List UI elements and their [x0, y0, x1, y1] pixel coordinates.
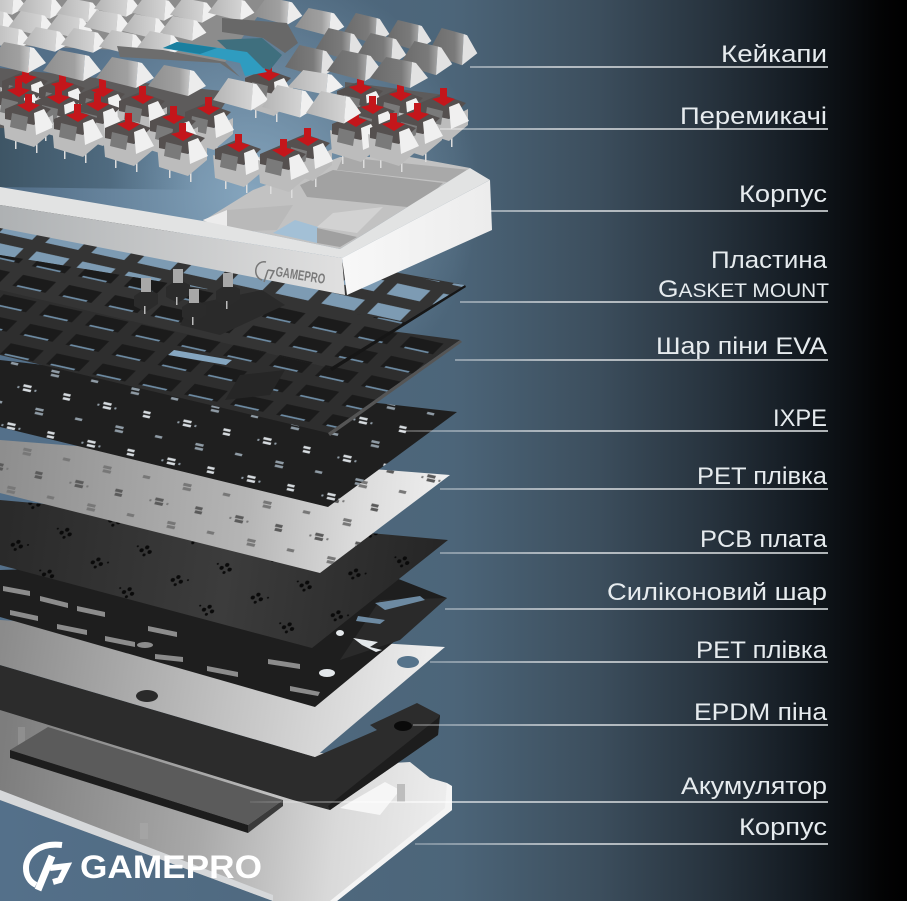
front keycaps — [148, 65, 361, 124]
layer: PET film lower — [0, 620, 445, 757]
layer: EVA foam plate — [0, 280, 462, 436]
layer: IXPE — [0, 360, 457, 507]
layer: battery — [10, 727, 283, 833]
layer: gasket mount plate — [0, 200, 466, 371]
small switches on plate — [134, 269, 240, 325]
label: battery: Акумулятор — [681, 773, 827, 800]
label: keycaps: Кейкапи — [721, 41, 827, 68]
label: PET film lower: PET плівка — [696, 637, 828, 664]
labels — [607, 41, 829, 841]
label: EVA foam: Шар піни EVA — [656, 333, 827, 360]
layer: keycaps — [0, 0, 477, 124]
brand logo — [26, 845, 262, 890]
layer: switches — [0, 63, 469, 198]
light keycaps — [0, 0, 344, 88]
teal keycap — [163, 42, 267, 76]
label: switches: Перемикачі — [680, 103, 827, 130]
leader lines — [250, 67, 828, 844]
layer: silicone — [0, 560, 447, 707]
label: PET film: PET плівка — [697, 463, 828, 490]
case logo: GAMEPRO — [275, 263, 326, 287]
label: PCB: PCB плата — [700, 526, 828, 553]
case logo — [256, 262, 326, 287]
label: case: Корпус — [739, 181, 827, 208]
exploded keyboard — [0, 0, 492, 901]
layer: bottom case — [0, 708, 452, 901]
label: EPDM foam: EPDM піна — [694, 699, 828, 726]
label: plate: Пластина — [711, 247, 828, 274]
logo wordmark: GAMEPRO — [80, 849, 262, 885]
label: IXPE: IXPE — [773, 405, 827, 432]
layer: top case — [0, 157, 492, 295]
logo mark — [26, 845, 67, 890]
layer: EPDM foam — [0, 665, 440, 810]
layer: PET film upper — [0, 440, 450, 573]
dark keycaps — [117, 13, 477, 88]
layer: PCB — [0, 500, 448, 648]
label: silicone layer: Силіконовий шар — [607, 579, 827, 606]
label: gasket mount: GASKET MOUNT — [658, 276, 829, 303]
label: bottom case: Корпус — [739, 814, 827, 841]
